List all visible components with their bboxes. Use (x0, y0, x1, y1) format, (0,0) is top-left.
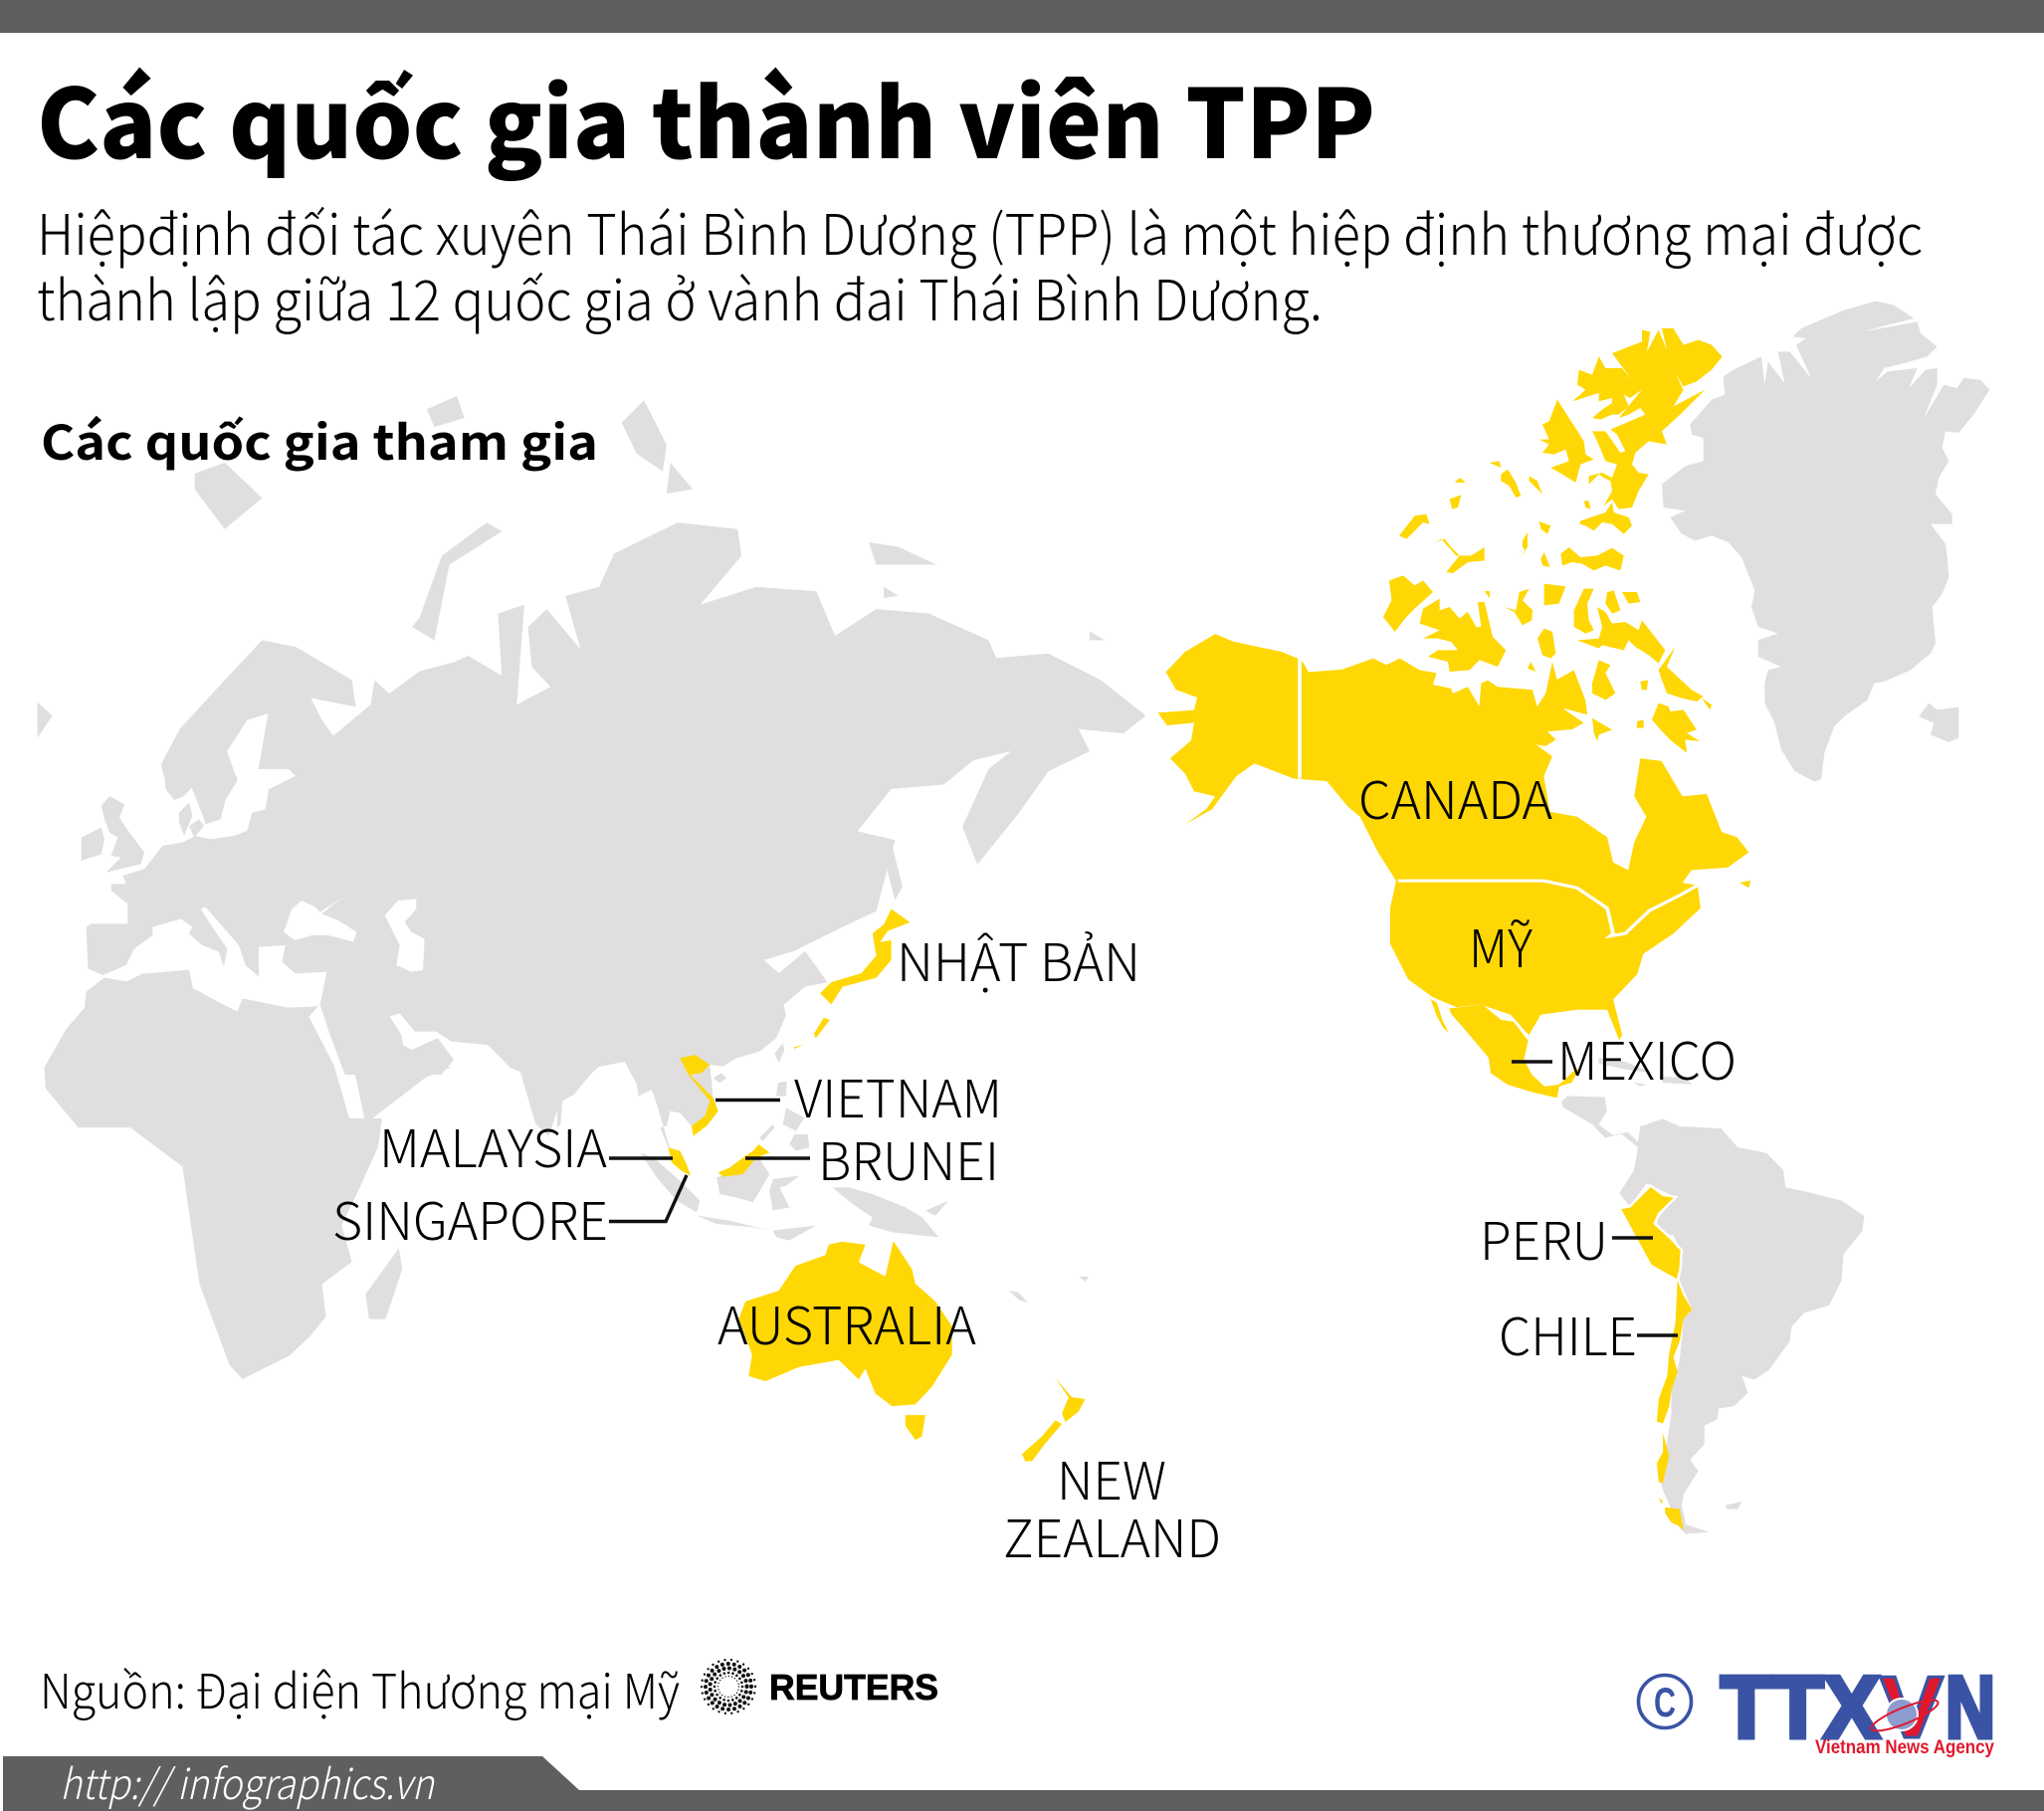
map: Ireland (82, 828, 104, 861)
map: Britain (102, 796, 144, 873)
map: Australia and New Zealand (738, 1241, 1086, 1462)
map: Greenland (1662, 302, 1989, 782)
label: New Zealand (1003, 1440, 1221, 1572)
map: Vietnam (680, 1055, 718, 1136)
world map (38, 302, 1989, 1534)
map: Japan (813, 908, 910, 1036)
map: Iceland (1919, 704, 1958, 742)
url text: http:// infographics.vn (60, 1751, 436, 1811)
map: Tasmania (906, 1415, 925, 1440)
icon: copyright: C (1654, 1679, 1676, 1725)
icon: copyright (1638, 1676, 1692, 1727)
map: Mexico (1431, 999, 1580, 1098)
map: China, Southeast Asia and Indonesia (557, 995, 948, 1241)
label: New Zealand: NEW (1057, 1440, 1166, 1514)
map: Malaysia peninsula (669, 1147, 691, 1176)
label: Singapore: SINGAPORE (332, 1180, 608, 1255)
map: Europe and Middle East (82, 776, 527, 1075)
map: Peru (1619, 1185, 1682, 1281)
map: Arctic islands of Canada (1383, 328, 1723, 753)
icon: Reuters logo: REUTERS (769, 1667, 938, 1708)
map: India and Arabia (353, 999, 1089, 1319)
label: Australia: AUSTRALIA (717, 1285, 976, 1359)
subtitle (37, 191, 1923, 337)
subtitle: thành lập giữa 12 quốc gia ở vành đai Thái Bình Dương. (37, 257, 1323, 337)
label: Peru: PERU (1480, 1200, 1608, 1275)
TTXVN logo: TTX (1721, 1658, 1880, 1756)
label: Japan: NHẬT BẢN (897, 921, 1140, 996)
map: Alaska, Canada and United States mainland (1158, 634, 1750, 1040)
map: Sakhalin (888, 842, 903, 901)
TTXVN logo: N (1945, 1658, 1995, 1756)
label: Brunei: BRUNEI (818, 1120, 999, 1195)
map: Malaysia Borneo and Brunei (718, 1144, 769, 1177)
TTXVN logo (1721, 1658, 1995, 1758)
map: border lines (1300, 660, 1698, 936)
subtitle: Hiệpđịnh đối tác xuyên Thái Bình Dương (TPP) là một hiệp định thương mại được (37, 191, 1923, 272)
label: United States: MỸ (1469, 907, 1533, 982)
icon: Reuters logo (702, 1660, 938, 1713)
source text: Nguồn: Đại diện Thương mại Mỹ (40, 1653, 680, 1722)
label: Canada: CANADA (1358, 759, 1552, 834)
map: Africa (45, 970, 382, 1379)
label: Mexico: MEXICO (1557, 1020, 1737, 1095)
map: New Zealand (1055, 1378, 1086, 1422)
map: Australia (738, 1241, 952, 1406)
TTXVN logo: Vietnam News Agency (1815, 1737, 1994, 1758)
TTXVN logo: V (1880, 1658, 1943, 1756)
label: Chile: CHILE (1499, 1296, 1637, 1370)
bottom bar with url tab (3, 1756, 2044, 1811)
map: Chile (1657, 1281, 1692, 1530)
map: Black Sea and Caspian Sea (284, 898, 425, 972)
heading: participating countries: Các quốc gia tham gia (41, 404, 598, 474)
map: Russia and north Asia (38, 396, 1145, 1045)
title: Các quốc gia thành viên TPP (37, 48, 1375, 186)
top bar (0, 0, 2044, 33)
label: Vietnam: VIETNAM (794, 1058, 1002, 1132)
label: Malaysia: MALAYSIA (379, 1107, 607, 1182)
icon: globe and orbit (1869, 1695, 1941, 1736)
label: New Zealand: ZEALAND (1003, 1498, 1221, 1572)
map: Vietnam, Malaysia and Brunei (669, 1025, 825, 1177)
map: South America (1431, 999, 1864, 1534)
